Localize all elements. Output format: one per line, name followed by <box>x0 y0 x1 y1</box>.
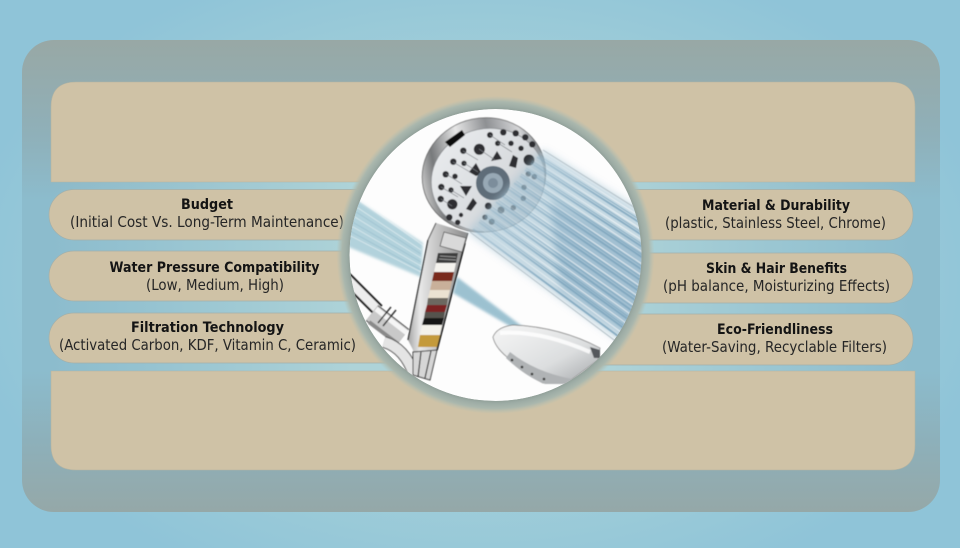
pill: filtration technology <box>49 313 469 363</box>
spray holes <box>438 129 537 225</box>
handle with filter window <box>408 223 468 380</box>
pill: budget: Budget <box>181 197 233 213</box>
pill: material and durability <box>520 190 913 240</box>
main shower head <box>421 116 546 233</box>
main water spray <box>467 148 642 341</box>
lower shower head side view <box>493 325 600 384</box>
pill: skin and hair benefits: Skin & Hair Benefits <box>706 261 847 277</box>
pill: skin and hair benefits <box>520 253 913 303</box>
pill: water pressure compatibility <box>49 251 469 301</box>
pill: filtration technology: Filtration Technology <box>131 320 284 336</box>
hose connector <box>346 278 414 375</box>
pill: material and durability: (plastic, Stainless Steel, Chrome) <box>665 214 886 232</box>
spray nozzle streaks <box>441 135 512 206</box>
pill: skin and hair benefits: (pH balance, Moisturizing Effects) <box>663 277 890 295</box>
top beige panel <box>51 82 915 182</box>
central shower head photo illustration <box>350 109 642 401</box>
pill: budget <box>49 190 469 240</box>
pill: water pressure compatibility: (Low, Medium, High) <box>146 276 284 294</box>
circular ring around photo <box>336 96 654 414</box>
middle light band behind the pills <box>50 180 914 372</box>
left water spray <box>346 198 523 328</box>
pill: water pressure compatibility: Water Pressure Compatibility <box>110 260 320 276</box>
pill: eco-friendliness: (Water-Saving, Recyclable Filters) <box>662 338 887 356</box>
pill: filtration technology: (Activated Carbon, KDF, Vitamin C, Ceramic) <box>59 336 356 354</box>
filter media layers <box>418 253 458 347</box>
centre hub <box>476 166 510 200</box>
pill: eco-friendliness: Eco-Friendliness <box>717 322 833 338</box>
pill: material and durability: Material & Durability <box>702 198 850 214</box>
pill: budget: (Initial Cost Vs. Long-Term Maintenance) <box>70 213 344 231</box>
bottom beige panel <box>51 371 915 470</box>
pill: eco-friendliness <box>520 314 913 365</box>
